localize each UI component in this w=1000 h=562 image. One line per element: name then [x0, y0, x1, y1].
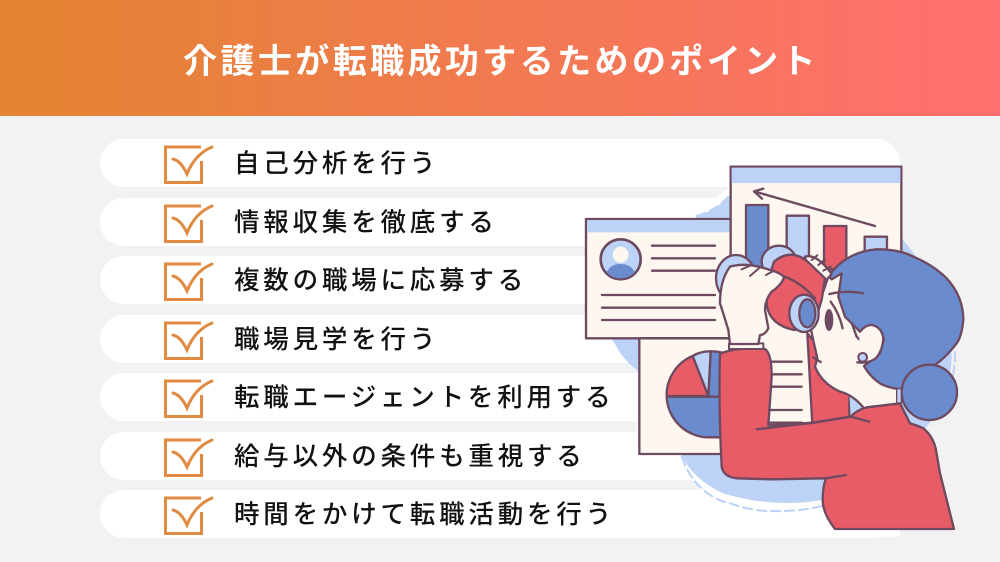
window: profile card	[586, 219, 733, 338]
neck gap	[849, 393, 864, 417]
item 5: 転職エージェントを利用する	[234, 384, 614, 412]
text lines	[602, 246, 715, 320]
finger lines	[742, 265, 774, 276]
item 3	[100, 256, 900, 304]
item 2	[100, 198, 900, 246]
item 6: 給与以外の条件も重視する	[234, 443, 586, 471]
binoculars body	[767, 255, 825, 330]
hair bun	[902, 365, 957, 420]
torso and arm	[719, 348, 954, 529]
item 7	[100, 490, 900, 538]
eyebrow	[829, 292, 863, 294]
header band	[0, 0, 1000, 116]
item 1	[100, 139, 900, 187]
mouth mark	[813, 357, 821, 362]
trend arrow	[754, 189, 875, 226]
background blob	[613, 195, 952, 503]
binocular crease	[784, 277, 815, 298]
left hand	[720, 265, 784, 344]
item 4	[100, 315, 900, 363]
title: 介護士が転職成功するためのポイント	[183, 43, 819, 81]
face	[811, 273, 898, 408]
item 3: 複数の職場に応募する	[234, 267, 527, 295]
eye	[825, 309, 833, 331]
item 7: 時間をかけて転職活動を行う	[234, 501, 615, 529]
sleeve crease	[757, 417, 869, 478]
ear	[857, 325, 883, 363]
item 1: 自己分析を行う	[234, 150, 439, 178]
checklist	[100, 139, 900, 538]
pie chart	[667, 351, 755, 437]
cuff	[729, 343, 763, 349]
sleeve back	[807, 333, 849, 425]
window: pie chart	[639, 338, 755, 454]
item 6	[100, 432, 900, 480]
earring	[858, 353, 867, 362]
item 4: 職場見学を行う	[234, 326, 439, 354]
right hand fingers	[805, 256, 832, 282]
hair tie	[897, 389, 901, 403]
item 5	[100, 373, 900, 421]
bars	[746, 205, 768, 268]
woman	[716, 246, 963, 529]
hair	[828, 249, 963, 389]
white halo behind illustration	[585, 187, 900, 537]
eye line	[831, 302, 843, 328]
dashed outline	[613, 197, 955, 511]
binocular lens left	[716, 255, 756, 302]
avatar	[601, 239, 641, 279]
binocular lens top	[762, 246, 796, 278]
front lens	[789, 295, 819, 332]
document behind arm	[762, 334, 813, 427]
window: bar chart	[731, 167, 901, 353]
item 2: 情報収集を徹底する	[234, 209, 498, 237]
